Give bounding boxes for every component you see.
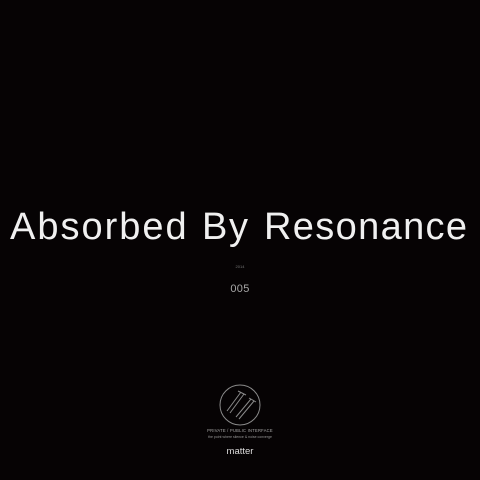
logo caption heading: PRIVATE / PUBLIC INTERFACE [207, 428, 273, 433]
icon: circular logo [220, 384, 260, 426]
title: Absorbed [10, 206, 189, 248]
small label: 2014 [236, 264, 244, 269]
title [10, 206, 468, 248]
title: By [202, 206, 250, 248]
title: Resonance [264, 206, 468, 248]
issue number: 005 [230, 283, 250, 295]
brand name: matter [227, 446, 253, 457]
logo caption text: the point where silence & noise converge [208, 435, 272, 439]
